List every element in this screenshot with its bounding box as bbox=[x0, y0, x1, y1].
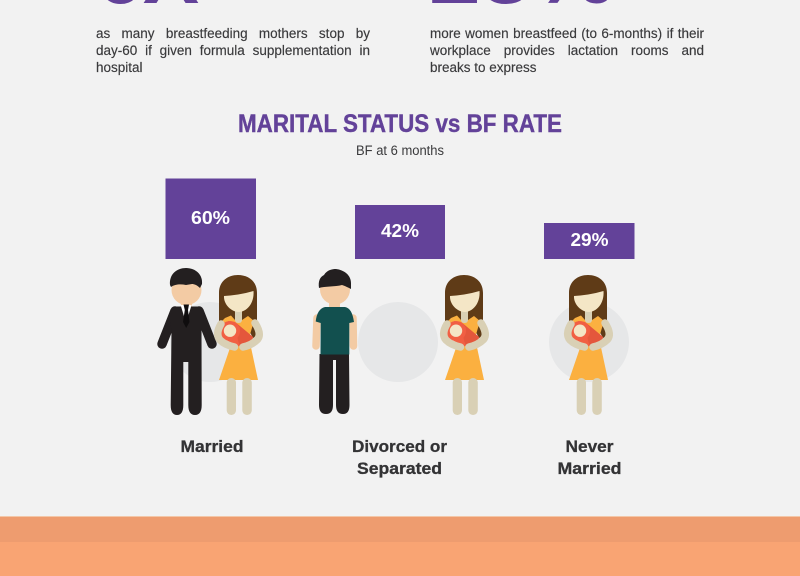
label: divorced or separated: Separated bbox=[357, 459, 442, 478]
text block: formula supplementation: as many breastfeeding mothers stop by bbox=[96, 26, 370, 41]
circle backdrop: divorced bbox=[358, 302, 438, 382]
bar: divorced or separated 42%: 42% bbox=[381, 221, 419, 241]
circle backdrop: never married bbox=[549, 302, 629, 382]
label: divorced or separated bbox=[352, 437, 447, 478]
bottom band bbox=[0, 516, 800, 576]
bar: married 60% bbox=[166, 178, 256, 259]
icon: mother with baby, married bbox=[218, 275, 259, 415]
icon: man in suit bbox=[162, 268, 212, 415]
bar: divorced or separated 42% bbox=[355, 205, 445, 259]
text block: workplace lactation rooms: workplace provides lactation rooms and bbox=[430, 43, 704, 58]
icon: mother with baby, divorced bbox=[444, 275, 485, 415]
label: never married bbox=[558, 437, 622, 478]
subtitle: BF at 6 months bbox=[356, 143, 444, 158]
text block: formula supplementation: day-60 if given formula supplementation in bbox=[96, 43, 370, 58]
text block: workplace lactation rooms: breaks to express bbox=[430, 60, 537, 75]
bar: never married 29%: 29% bbox=[570, 230, 608, 250]
bar: never married 29% bbox=[544, 223, 634, 259]
text block: formula supplementation bbox=[96, 26, 370, 76]
text block: formula supplementation: hospital bbox=[96, 60, 143, 75]
text block: workplace lactation rooms: more women breastfeed (to 6-months) if their bbox=[430, 26, 704, 41]
label: married: Married bbox=[180, 437, 244, 456]
title: MARITAL STATUS vs BF RATE bbox=[238, 110, 562, 138]
circle backdrop: married bbox=[170, 302, 250, 382]
icon: man in teal shirt bbox=[316, 269, 354, 414]
icon: mother with baby, never married bbox=[568, 275, 609, 415]
bar: married 60%: 60% bbox=[191, 208, 230, 228]
label: divorced or separated: Divorced or bbox=[352, 437, 447, 456]
text block: workplace lactation rooms bbox=[430, 26, 704, 76]
label: never married: Married bbox=[558, 459, 622, 478]
label: never married: Never bbox=[566, 437, 614, 456]
